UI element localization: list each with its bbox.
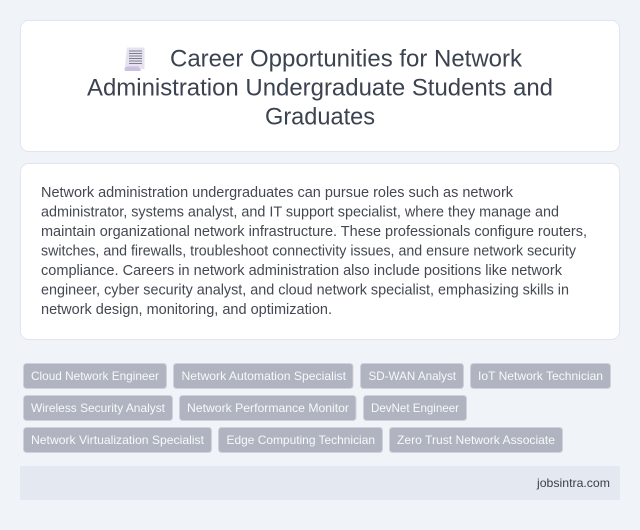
description text: engineer, cyber security analyst, and cloud network specialist, emphasizing skills in — [41, 282, 569, 298]
title text: Graduates — [265, 104, 375, 130]
title text: Administration Undergraduate Students and — [87, 74, 553, 102]
tag: Network Performance Monitor — [180, 396, 356, 420]
description text: Network administration undergraduates can pursue roles such as network — [41, 185, 514, 201]
tag: Network Performance Monitor: Network Performance Monitor — [187, 401, 349, 415]
tag: Network Automation Specialist — [174, 364, 353, 388]
footer bar — [20, 466, 620, 500]
description text: compliance. Careers in network administration also include positions like network — [41, 263, 563, 279]
tag: IoT Network Technician: IoT Network Technician — [478, 369, 603, 383]
tag: SD-WAN Analyst: SD-WAN Analyst — [368, 369, 457, 383]
tag: Zero Trust Network Associate — [390, 428, 562, 452]
tag: Cloud Network Engineer — [24, 364, 166, 388]
footer source text: jobsintra.com — [536, 476, 610, 490]
tag: Edge Computing Technician: Edge Computing Technician — [226, 433, 375, 447]
tag: SD-WAN Analyst — [360, 364, 464, 388]
tag: Zero Trust Network Associate: Zero Trust Network Associate — [397, 433, 555, 447]
tag list: career roles — [24, 364, 610, 452]
tag: Network Virtualization Specialist — [24, 428, 212, 452]
tag: DevNet Engineer — [364, 396, 466, 420]
description text: switches, and firewalls, troubleshoot connectivity issues, and ensure network security — [41, 244, 577, 260]
title text — [87, 46, 553, 130]
tag: Cloud Network Engineer: Cloud Network Engineer — [31, 369, 159, 383]
description text — [41, 185, 587, 318]
icon: receipt scroll — [124, 48, 144, 71]
tag: Network Automation Specialist: Network Automation Specialist — [182, 369, 347, 383]
title text: Career Opportunities for Network — [170, 46, 523, 72]
tag: Network Virtualization Specialist: Network Virtualization Specialist — [31, 433, 205, 447]
tag: Wireless Security Analyst: Wireless Security Analyst — [31, 401, 166, 415]
panel: description card — [20, 164, 620, 340]
tag: Wireless Security Analyst — [24, 396, 172, 420]
description text: maintain organizational network infrastructure. These professionals configure routers, — [41, 224, 587, 240]
panel: title card — [20, 20, 620, 152]
description text: network design, monitoring, and optimization. — [41, 302, 332, 318]
tag: IoT Network Technician — [470, 364, 610, 388]
tag: Edge Computing Technician — [218, 428, 382, 452]
tag: DevNet Engineer: DevNet Engineer — [371, 401, 459, 415]
description text: administrator, systems analyst, and IT support specialist, where they manage and — [41, 204, 559, 220]
